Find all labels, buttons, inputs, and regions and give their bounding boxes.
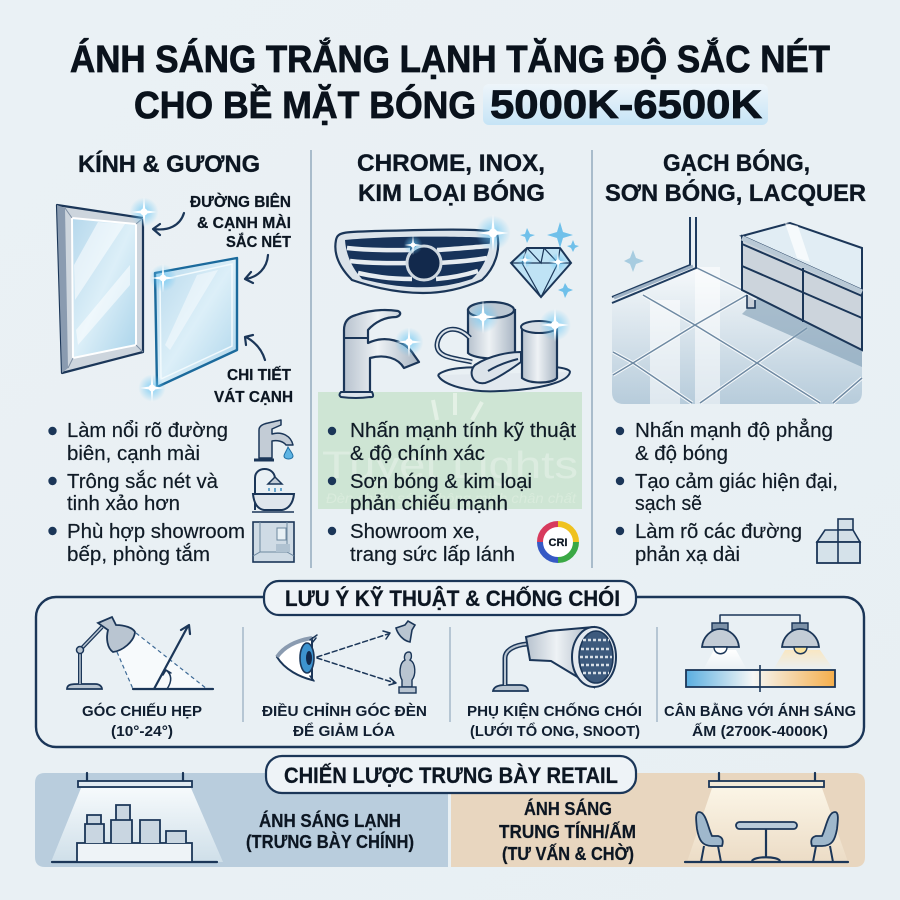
- caption: góc chiếu hẹp: (10°-24°): [111, 723, 173, 740]
- heading: kính và gương: KÍNH & GƯƠNG: [78, 150, 260, 178]
- arrows: mirror callouts: [153, 213, 268, 360]
- heading: chrome: CHROME, INOX,: [357, 150, 545, 177]
- bullets: gạch: & độ bóng: [635, 443, 728, 465]
- icon: snoot accessory: [493, 627, 616, 691]
- bullets: gạch: Làm rõ các đường: [635, 521, 802, 543]
- caption: cân bằng: [664, 702, 856, 740]
- icon: narrow-beam lamp: [67, 617, 213, 689]
- icon: pendants and color bar: [686, 615, 835, 692]
- illustration: car grille: [335, 214, 511, 293]
- caption: phụ kiện chống chói: PHỤ KIỆN CHỐNG CHÓI: [467, 702, 642, 720]
- bullets: kính: biên, cạnh mài: [67, 443, 200, 465]
- illustration: mirror: [57, 197, 158, 373]
- callout: đường biên: & CẠNH MÀI: [197, 213, 291, 232]
- caption: góc chiếu hẹp: GÓC CHIẾU HẸP: [82, 702, 202, 720]
- bullets: chrome: Showroom xe,: [350, 521, 480, 543]
- heading: gạch bóng: [605, 149, 866, 207]
- caption: cân bằng: ẤM (2700K-4000K): [692, 723, 828, 740]
- bullets: kính: bếp, phòng tắm: [67, 543, 210, 566]
- illustration: faucet: [340, 310, 423, 398]
- icon: small room: [253, 522, 294, 562]
- watermark: Đèn chiếu sáng thông minh chân chất: [326, 490, 577, 506]
- title: ÁNH SÁNG TRẮNG LẠNH TĂNG ĐỘ SẮC NÉT: [70, 36, 830, 81]
- bullets: kính: tinh xảo hơn: [67, 493, 180, 515]
- title: [70, 36, 830, 127]
- bullets: chrome: Nhấn mạnh tính kỹ thuật: [350, 420, 576, 442]
- caption: phụ kiện chống chói: (LƯỚI TỔ ONG, SNOOT): [470, 722, 640, 740]
- panel: ánh sáng ấm: ÁNH SÁNG: [524, 798, 612, 819]
- bullets: kính: [48, 420, 245, 566]
- bullets: gạch: Nhấn mạnh độ phẳng: [635, 418, 833, 442]
- caption: điều chỉnh góc đèn: ĐIỀU CHỈNH GÓC ĐÈN: [262, 702, 427, 720]
- heading: gạch bóng: GẠCH BÓNG,: [663, 149, 810, 177]
- heading: chrome: [357, 150, 545, 207]
- icon: small bath: [252, 469, 294, 512]
- panel: chiến lược retail: [35, 756, 865, 867]
- bullets: chrome: phản chiếu mạnh: [350, 493, 508, 515]
- watermark: Tuyet Lights: [322, 445, 578, 487]
- bullets: gạch: Tạo cảm giác hiện đại,: [635, 471, 838, 493]
- illustration: glass panel: [138, 258, 237, 402]
- illustration: glossy floor: [612, 217, 862, 404]
- heading: chrome: KIM LOẠI BÓNG: [358, 179, 545, 207]
- bullets: gạch: sạch sẽ: [635, 493, 702, 515]
- bullets: kính: Làm nổi rõ đường: [67, 420, 228, 442]
- title highlight: [483, 84, 768, 125]
- panel: ánh sáng ấm: (TƯ VẤN & CHỜ): [502, 843, 634, 864]
- callout: vát cạnh: [214, 365, 293, 406]
- bullets: chrome: trang sức lấp lánh: [350, 544, 515, 566]
- panel: ánh sáng ấm: [451, 773, 865, 867]
- icon: eye and lamp: [277, 621, 416, 693]
- panel: ánh sáng lạnh: [35, 773, 448, 867]
- panel: lưu ý kỹ thuật: [36, 581, 864, 747]
- caption: góc chiếu hẹp: [82, 702, 202, 740]
- title: CHO BỀ MẶT BÓNG: [134, 83, 476, 127]
- icon: CRI: CRI: [549, 537, 567, 549]
- panel: ánh sáng lạnh: (TRƯNG BÀY CHÍNH): [246, 831, 414, 852]
- column dividers: [311, 150, 592, 568]
- bullets: gạch: [616, 418, 838, 566]
- caption: điều chỉnh góc đèn: [262, 702, 427, 740]
- heading: gạch bóng: SƠN BÓNG, LACQUER: [605, 179, 866, 207]
- panel: ánh sáng ấm: TRUNG TÍNH/ẤM: [499, 821, 636, 842]
- panel: ánh sáng lạnh: ÁNH SÁNG LẠNH: [259, 810, 401, 831]
- heading pill: lưu ý: LƯU Ý KỸ THUẬT & CHỐNG CHÓI: [285, 585, 620, 611]
- callout: đường biên: [190, 192, 291, 251]
- callout: vát cạnh: CHI TIẾT: [227, 365, 291, 384]
- bullets: chrome: [328, 420, 576, 566]
- bullets: chrome: & độ chính xác: [350, 443, 485, 465]
- bullets: kính: Phù hợp showroom: [67, 521, 245, 543]
- heading pill: lưu ý: [264, 581, 636, 615]
- callout: vát cạnh: VÁT CẠNH: [214, 387, 293, 406]
- icon: glass boxes: [817, 519, 860, 563]
- bullets: kính: Trông sắc nét và: [67, 470, 219, 493]
- caption: điều chỉnh góc đèn: ĐỂ GIẢM LÓA: [293, 722, 395, 740]
- icon: CRI: [540, 524, 576, 560]
- bullets: gạch: phản xạ dài: [635, 544, 740, 566]
- caption: phụ kiện chống chói: [467, 702, 642, 740]
- heading pill: chiến lược: [266, 756, 636, 793]
- bullets: chrome: Sơn bóng & kim loại: [350, 471, 532, 493]
- illustration: chrome cups: [437, 300, 571, 391]
- title: 5000K-6500K: [490, 83, 762, 127]
- callout: đường biên: SẮC NÉT: [226, 232, 291, 251]
- watermark: [318, 392, 582, 509]
- caption: cân bằng: CÂN BẰNG VỚI ÁNH SÁNG: [664, 702, 856, 720]
- icon: small faucet: [254, 420, 293, 460]
- illustration: diamond: [511, 222, 579, 298]
- heading pill: chiến lược: CHIẾN LƯỢC TRƯNG BÀY RETAIL: [284, 763, 618, 788]
- callout: đường biên: ĐƯỜNG BIÊN: [190, 192, 291, 211]
